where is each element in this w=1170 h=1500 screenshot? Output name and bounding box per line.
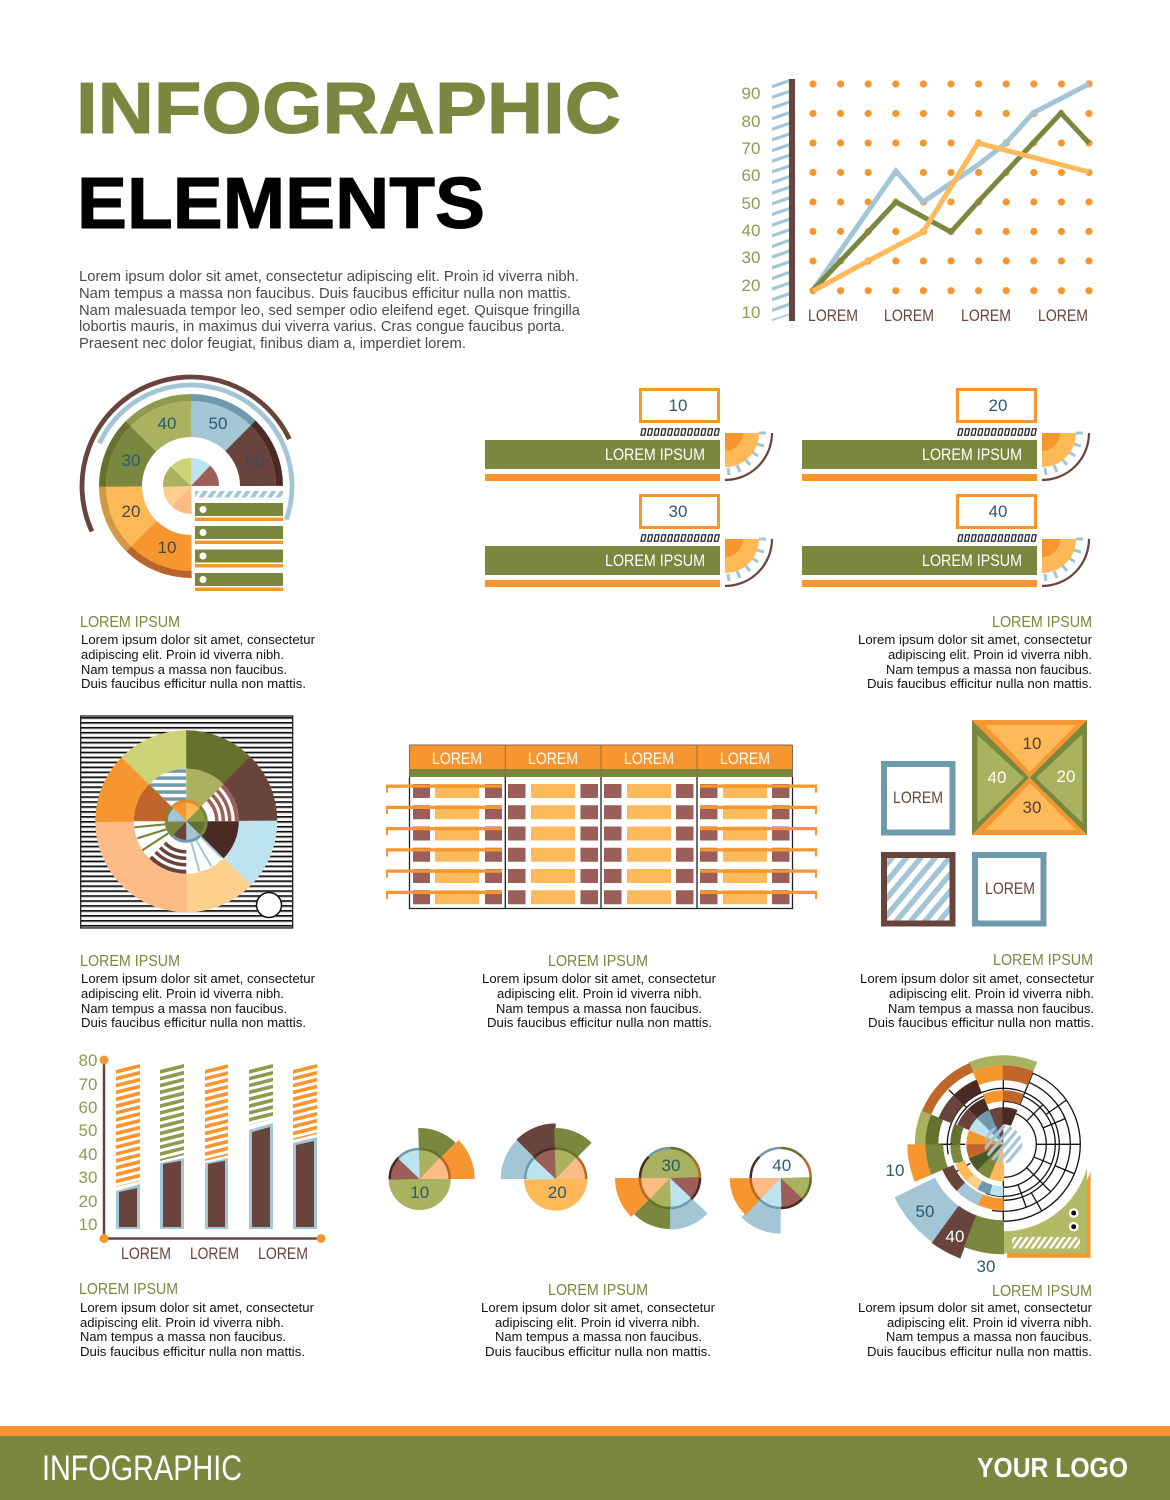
title: ELEMENTS — [77, 164, 485, 244]
text block: row 2 right: Nam tempus a massa non faucibus. — [888, 1001, 1094, 1016]
text block: row 2 left — [80, 953, 316, 1030]
series: yellow line — [813, 143, 1089, 291]
title: INFOGRAPHIC — [76, 69, 621, 149]
text block: row 3 centre: Duis faucibus efficitur nulla non mattis. — [485, 1344, 711, 1359]
series: green line — [813, 113, 1089, 290]
core — [158, 793, 215, 850]
text block: row 3 left: Duis faucibus efficitur nulla non mattis. — [80, 1344, 305, 1359]
text block: row 3 centre: adipiscing elit. Proin id viverra nibh. — [495, 1315, 700, 1330]
white right half of hatch — [1003, 1124, 1023, 1164]
hatched centre — [984, 1125, 1022, 1163]
middle ring — [134, 768, 239, 874]
intro text block: lobortis mauris, in maximus dui viverra varius. Cras congue faucibus porta. — [79, 319, 565, 335]
footer — [0, 1426, 1170, 1500]
pie 20 — [513, 1136, 599, 1222]
sunburst chart — [81, 716, 293, 928]
footer logo: YOUR LOGO — [977, 1452, 1128, 1483]
intro text block: Lorem ipsum dolor sit amet, consectetur adipiscing elit. Proin id viverra nibh. — [79, 269, 579, 285]
table cells — [413, 784, 790, 904]
text block: row 2 left: Nam tempus a massa non faucibus. — [81, 1001, 287, 1016]
text block: row 3 centre: Lorem ipsum dolor sit amet, consectetur — [481, 1300, 716, 1315]
title — [76, 69, 621, 244]
list panel — [193, 487, 284, 593]
intro text block: Nam tempus a massa non faucibus. Duis faucibus efficitur nulla non mattis. — [79, 286, 571, 302]
donut segments — [66, 361, 316, 611]
text block: row 1 left: adipiscing elit. Proin id viverra nibh. — [81, 647, 284, 662]
left row rules — [386, 784, 502, 899]
banner 20 — [802, 390, 1089, 481]
y axis labels: 40 — [742, 221, 760, 240]
square elements — [884, 720, 1087, 924]
polar labels — [886, 1161, 995, 1276]
y labels: 50 — [79, 1121, 97, 1140]
donut values: 20 — [122, 502, 140, 521]
text block: row 3 left: LOREM IPSUM — [79, 1281, 178, 1298]
series: blue line — [813, 84, 1089, 290]
y labels: 30 — [79, 1168, 97, 1187]
text block: row 3 right: LOREM IPSUM — [992, 1283, 1092, 1300]
y axis labels: 20 — [742, 276, 760, 295]
polar labels: 40 — [946, 1227, 964, 1246]
text block: row 3 left: Lorem ipsum dolor sit amet, consectetur — [80, 1300, 315, 1315]
polar labels: 50 — [916, 1202, 934, 1221]
polar labels: 30 — [977, 1257, 995, 1276]
outer ring — [85, 720, 288, 923]
banner 30: LOREM IPSUM — [605, 552, 705, 570]
bar chart — [79, 1051, 326, 1263]
table header: LOREM — [528, 750, 578, 768]
text block: row 2 left: Lorem ipsum dolor sit amet, consectetur — [81, 971, 316, 986]
text block: row 2 centre: adipiscing elit. Proin id viverra nibh. — [497, 986, 702, 1001]
text block: row 1 left: Nam tempus a massa non faucibus. — [81, 662, 287, 677]
x axis labels: LOREM — [808, 307, 858, 325]
y axis labels: 90 — [742, 84, 760, 103]
grid rings — [912, 1053, 1095, 1236]
text block: row 2 left: LOREM IPSUM — [80, 953, 180, 970]
axes — [100, 1056, 326, 1243]
text block: row 3 left: Nam tempus a massa non faucibus. — [80, 1329, 286, 1344]
quadrant square — [972, 720, 1087, 835]
x labels — [121, 1245, 308, 1263]
text block: row 3 centre: Nam tempus a massa non faucibus. — [495, 1329, 702, 1344]
data table — [386, 745, 817, 908]
text block: row 1 left: LOREM IPSUM — [80, 614, 180, 631]
donut values: 50 — [209, 414, 227, 433]
coloured segments — [866, 1007, 1141, 1282]
text block: row 2 centre: Nam tempus a massa non faucibus. — [496, 1001, 702, 1016]
text block: row 2 centre: Duis faucibus efficitur nulla non mattis. — [487, 1015, 712, 1030]
y axis labels: 10 — [742, 303, 760, 322]
text block: row 2 centre: LOREM IPSUM — [548, 953, 648, 970]
intro text block — [79, 269, 581, 352]
text block: row 2 right: Duis faucibus efficitur nulla non mattis. — [868, 1015, 1094, 1030]
banner 10 — [485, 390, 772, 481]
donut values: 30 — [122, 451, 140, 470]
label square 2 — [975, 855, 1044, 924]
text block: row 2 right — [860, 952, 1095, 1030]
banner 40: 40 — [989, 502, 1007, 521]
y axis labels: 60 — [742, 166, 760, 185]
bars — [116, 1123, 317, 1229]
text block: row 1 right: LOREM IPSUM — [992, 614, 1092, 631]
x labels: LOREM — [190, 1245, 239, 1263]
hatched square — [884, 855, 952, 924]
x labels: LOREM — [121, 1245, 171, 1263]
y labels: 20 — [79, 1192, 97, 1211]
banner 20: 20 — [989, 396, 1007, 415]
y labels: 10 — [79, 1215, 97, 1234]
text block: row 1 right: Nam tempus a massa non faucibus. — [886, 662, 1092, 677]
text block: row 1 right: Lorem ipsum dolor sit amet, consectetur — [858, 632, 1093, 647]
polar chart — [866, 1007, 1141, 1282]
text block: row 3 right: adipiscing elit. Proin id viverra nibh. — [887, 1315, 1092, 1330]
label square 1 — [884, 764, 952, 832]
text block: row 2 left: adipiscing elit. Proin id viverra nibh. — [81, 986, 284, 1001]
x axis labels: LOREM — [884, 307, 934, 325]
corner circle — [256, 892, 282, 918]
y axis labels: 80 — [742, 112, 760, 131]
quadrant square: 30 — [1023, 798, 1041, 817]
quadrant square: 10 — [1023, 734, 1041, 753]
axis hatch — [772, 82, 789, 318]
pie 30 — [628, 1136, 712, 1220]
pie 10: 10 — [410, 1183, 429, 1202]
x axis labels: LOREM — [1038, 307, 1088, 325]
banner 20: LOREM IPSUM — [922, 446, 1022, 464]
table header: LOREM — [720, 750, 770, 768]
outer arcs — [47, 342, 335, 630]
label square 2: LOREM — [985, 880, 1035, 898]
hatched bar tops — [128, 1067, 305, 1184]
y labels — [79, 1051, 97, 1234]
striped background — [81, 716, 293, 928]
y axis labels: 70 — [742, 139, 760, 158]
pie 40 — [738, 1136, 823, 1220]
intro text block: Praesent nec dolor feugiat, finibus diam a, imperdiet lorem. — [79, 336, 466, 352]
pie 10 — [377, 1137, 462, 1221]
y labels: 40 — [79, 1145, 97, 1164]
banner 40 — [802, 496, 1089, 587]
polar labels: 10 — [886, 1161, 904, 1180]
x axis labels: LOREM — [961, 307, 1011, 325]
quadrant square: 20 — [1057, 767, 1075, 786]
table frame — [410, 777, 792, 908]
text block: row 2 right: adipiscing elit. Proin id viverra nibh. — [889, 986, 1094, 1001]
text block: row 3 right: Duis faucibus efficitur nulla non mattis. — [867, 1344, 1092, 1359]
pie 30: 30 — [662, 1156, 680, 1175]
y axis labels: 50 — [742, 194, 760, 213]
text block: row 1 right: Duis faucibus efficitur nulla non mattis. — [867, 676, 1092, 691]
corner shape — [1003, 1168, 1091, 1258]
text block: row 2 left: Duis faucibus efficitur nulla non mattis. — [81, 1015, 306, 1030]
donut values: 60 — [246, 451, 264, 470]
banner 40: LOREM IPSUM — [922, 552, 1022, 570]
y labels: 80 — [79, 1051, 97, 1070]
text block: row 1 left: Duis faucibus efficitur nulla non mattis. — [81, 676, 306, 691]
text block: row 1 left — [80, 614, 316, 691]
text block: row 2 centre — [482, 953, 717, 1030]
table header — [410, 745, 792, 777]
intro text block: Nam malesuada tempor leo, sed semper odio eleifend eget. Quisque fringilla — [79, 303, 581, 319]
table header: LOREM — [432, 750, 482, 768]
pie 40: 40 — [772, 1156, 791, 1175]
right row rules — [700, 784, 817, 899]
text block: row 2 right: LOREM IPSUM — [993, 952, 1093, 969]
footer title: INFOGRAPHIC — [42, 1449, 242, 1488]
text block: row 3 right: Lorem ipsum dolor sit amet, consectetur — [858, 1300, 1093, 1315]
dot grid — [809, 80, 1093, 294]
donut values: 40 — [158, 414, 176, 433]
table header: LOREM — [624, 750, 674, 768]
donut chart with list panel — [47, 342, 335, 630]
y labels: 70 — [79, 1075, 97, 1094]
label square 1: LOREM — [893, 789, 943, 807]
axis bar — [789, 79, 795, 321]
x axis labels — [808, 307, 1088, 325]
text block: row 3 left — [79, 1281, 315, 1359]
text block: row 3 right — [858, 1283, 1093, 1359]
banner 10: 10 — [669, 396, 687, 415]
banner 10: LOREM IPSUM — [605, 446, 705, 464]
text block: row 3 centre — [481, 1282, 716, 1359]
text block: row 1 right — [858, 614, 1093, 691]
text block: row 1 left: Lorem ipsum dolor sit amet, consectetur — [81, 632, 316, 647]
text block: row 1 right: adipiscing elit. Proin id viverra nibh. — [888, 647, 1092, 662]
text block: row 3 left: adipiscing elit. Proin id viverra nibh. — [80, 1315, 284, 1330]
quadrant square: 40 — [988, 768, 1006, 787]
donut values — [122, 414, 264, 557]
grid spokes — [936, 1065, 1080, 1221]
pie 20: 20 — [548, 1183, 567, 1202]
text block: row 3 right: Nam tempus a massa non faucibus. — [886, 1329, 1092, 1344]
y axis labels — [742, 84, 760, 322]
text block: row 3 centre: LOREM IPSUM — [548, 1282, 648, 1299]
line chart — [742, 79, 1093, 325]
header dividers — [410, 745, 792, 777]
text block: row 2 right: Lorem ipsum dolor sit amet, consectetur — [860, 971, 1095, 986]
y labels: 60 — [79, 1098, 97, 1117]
x labels: LOREM — [258, 1245, 308, 1263]
text block: row 2 centre: Lorem ipsum dolor sit amet, consectetur — [482, 971, 717, 986]
donut values: 10 — [158, 538, 176, 557]
banner 30 — [485, 496, 772, 587]
banner 30: 30 — [669, 502, 687, 521]
y axis labels: 30 — [742, 248, 760, 267]
